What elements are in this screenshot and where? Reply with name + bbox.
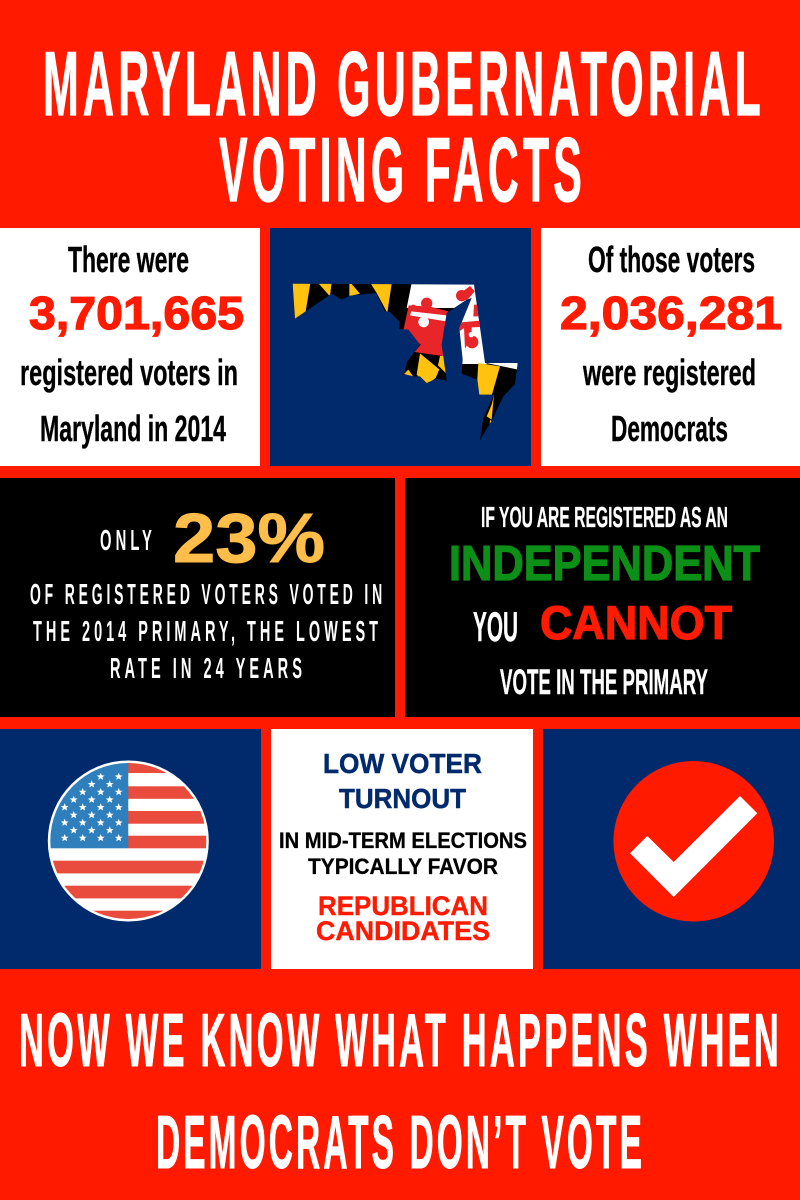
panel: Maryland flag map xyxy=(270,228,531,466)
title xyxy=(43,34,765,221)
panel: low voter turnout: TURNOUT xyxy=(339,783,466,814)
panel: low voter turnout: LOW VOTER xyxy=(323,748,482,779)
panel: registered voters: There were xyxy=(68,239,189,280)
icon: round US flag xyxy=(48,760,209,922)
panel: low voter turnout: TYPICALLY FAVOR xyxy=(308,854,498,879)
panel: independent voters xyxy=(405,478,800,717)
panel: American flag xyxy=(0,729,261,969)
panel: independent voters: YOU xyxy=(473,603,518,650)
panel: 23 percent turnout xyxy=(0,478,395,717)
panel: independent voters: INDEPENDENT xyxy=(449,537,760,591)
panel: registered Democrats: Democrats xyxy=(611,408,728,449)
panel: registered voters xyxy=(0,228,260,466)
panel: 23 percent turnout: RATE IN 24 YEARS xyxy=(110,653,306,685)
panel: registered Democrats xyxy=(541,228,800,466)
panel: registered Democrats: 2,036,281 xyxy=(560,287,782,339)
panel: low voter turnout: REPUBLICAN xyxy=(318,891,488,921)
panel: 23 percent turnout: THE 2014 PRIMARY, THE LOWEST xyxy=(33,616,382,648)
panel: low voter turnout: CANDIDATES xyxy=(316,916,490,946)
panel: registered voters: Maryland in 2014 xyxy=(40,408,226,449)
icon: red circle check mark xyxy=(613,761,774,922)
icon: Maryland state shape with flag xyxy=(290,281,523,441)
panel: check mark xyxy=(543,729,800,969)
panel: registered voters: 3,701,665 xyxy=(29,287,244,339)
panel: 23 percent turnout: 23% xyxy=(173,499,325,577)
closing statement xyxy=(19,998,782,1184)
panel: low voter turnout: IN MID-TERM ELECTIONS xyxy=(279,828,527,853)
panel: independent voters: CANNOT xyxy=(540,596,732,649)
panel: registered voters: registered voters in xyxy=(20,352,238,393)
text: OF REGISTERED VOTERS VOTED IN xyxy=(30,579,386,611)
panel: 23 percent turnout: ONLY xyxy=(100,525,156,557)
panel: low voter turnout xyxy=(271,729,533,969)
